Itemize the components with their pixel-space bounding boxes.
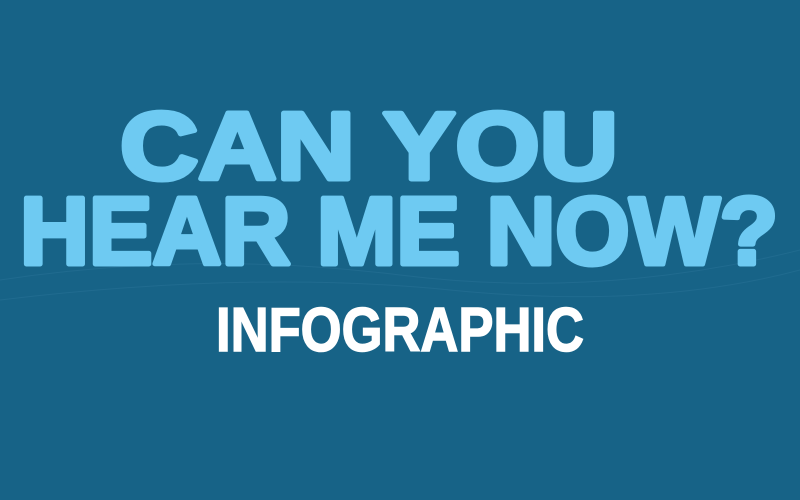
title [20, 93, 778, 285]
title: CAN YOU [120, 93, 618, 200]
subtitle: INFOGRAPHIC [216, 296, 584, 365]
title: HEAR ME NOW? [20, 178, 778, 285]
decorative faint curves [0, 250, 800, 300]
